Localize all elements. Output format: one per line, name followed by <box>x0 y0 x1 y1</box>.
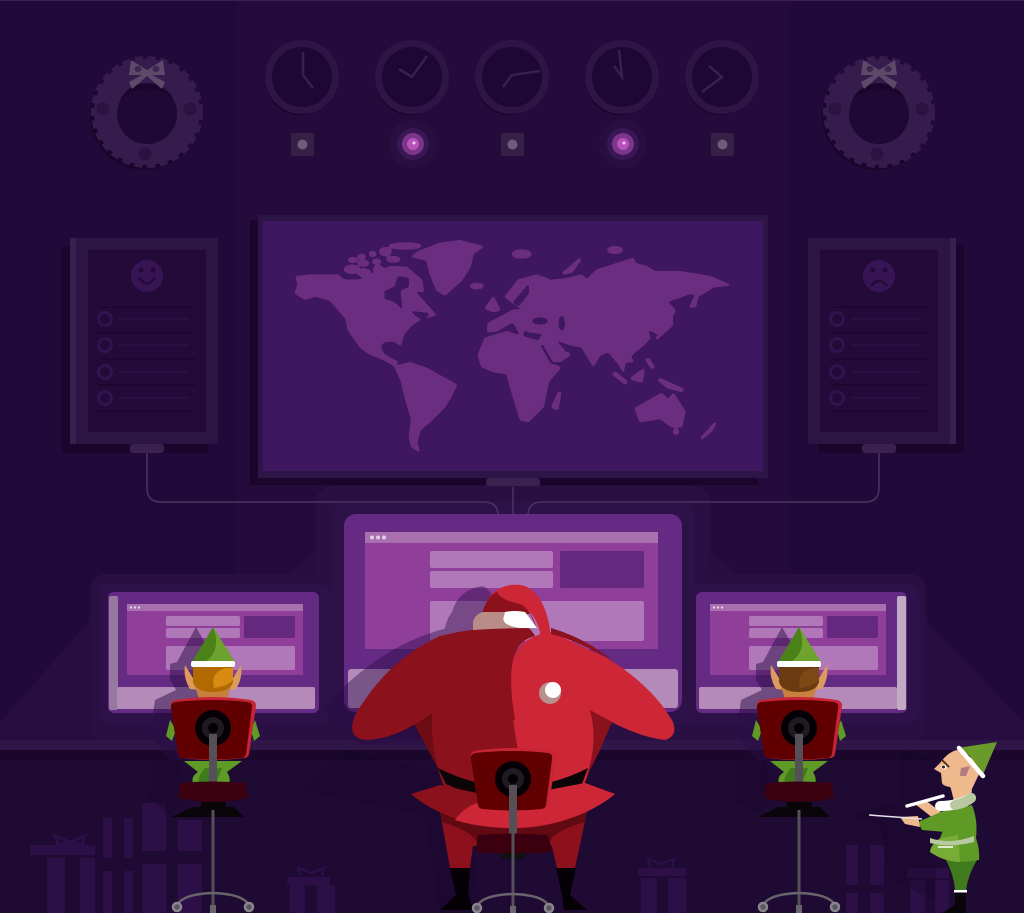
right elf <box>752 627 846 913</box>
torso <box>432 705 598 790</box>
neck <box>193 680 233 702</box>
center monitor <box>344 514 682 712</box>
hair <box>193 666 233 692</box>
greenland <box>412 241 483 295</box>
torso and arms <box>166 720 260 788</box>
left arm <box>352 627 535 740</box>
left monitor <box>108 592 319 713</box>
world map <box>295 241 730 452</box>
santa shadow on screen <box>322 586 500 745</box>
head <box>934 750 981 797</box>
clock 5 <box>685 44 756 115</box>
boots <box>172 807 244 817</box>
eurasia <box>487 258 730 372</box>
hat <box>957 742 997 777</box>
santa chair <box>471 748 556 839</box>
africa <box>478 332 560 422</box>
body back band <box>413 700 612 787</box>
light off 3 <box>501 133 524 156</box>
clock 4 <box>585 44 656 115</box>
hat <box>778 627 821 662</box>
back arm hand <box>915 800 945 822</box>
chair base <box>173 802 253 913</box>
seat <box>178 782 248 802</box>
belt <box>438 768 588 800</box>
ears <box>771 665 827 690</box>
legs <box>440 812 587 868</box>
naughty list panel <box>808 238 964 453</box>
chair <box>757 697 842 788</box>
south america <box>395 363 457 452</box>
hat band <box>959 748 983 776</box>
left elf <box>166 627 260 913</box>
neck <box>950 785 972 805</box>
baton <box>869 815 922 819</box>
north america <box>295 267 436 366</box>
collar shade <box>955 798 971 805</box>
indicator lights <box>291 120 734 168</box>
hat <box>473 585 561 704</box>
name rows <box>98 307 196 411</box>
clocks <box>265 44 756 115</box>
hat <box>192 627 235 662</box>
coat skirt <box>411 783 615 828</box>
ear <box>958 762 979 778</box>
clock 1 <box>265 44 336 115</box>
eye <box>942 764 946 770</box>
good list panel <box>62 238 218 453</box>
neck <box>779 680 819 702</box>
front arm <box>918 806 968 832</box>
ear inner <box>960 766 970 776</box>
conductor elf <box>869 742 997 913</box>
right elf shadow on screen <box>736 627 806 760</box>
islands <box>470 247 715 438</box>
inland seas <box>385 277 573 364</box>
santa chair hub <box>501 853 525 859</box>
land masses <box>295 241 730 452</box>
collar <box>940 798 971 806</box>
smiley icon <box>131 260 163 292</box>
light on 2 <box>389 120 437 168</box>
clock 2 <box>375 44 446 115</box>
wreath left <box>90 59 200 170</box>
left elf shadow on screen <box>150 627 220 760</box>
boots <box>758 807 830 817</box>
leg <box>946 860 977 890</box>
light on 4 <box>599 120 647 168</box>
santa <box>352 585 674 913</box>
cables <box>147 453 879 516</box>
light beams <box>0 486 1024 740</box>
torso and arms <box>752 720 846 788</box>
window dots <box>370 536 386 540</box>
floor shadows <box>150 750 940 913</box>
front hand <box>900 816 920 827</box>
belt <box>930 836 974 845</box>
coat <box>930 805 979 862</box>
australia <box>635 393 685 427</box>
main monitor with world map <box>250 215 768 487</box>
chair <box>171 697 256 788</box>
gifts left <box>30 803 335 913</box>
right shoulder top edge <box>551 628 612 660</box>
seat <box>764 782 834 802</box>
frowny icon <box>863 260 895 292</box>
chair base <box>759 802 839 913</box>
right monitor <box>696 592 907 713</box>
santa chair base <box>473 811 553 913</box>
arctic islands <box>344 243 421 276</box>
light off 5 <box>711 133 734 156</box>
hair <box>779 666 819 692</box>
boots <box>440 868 587 910</box>
light off 1 <box>291 133 314 156</box>
hair brow <box>942 760 949 767</box>
clock 3 <box>475 44 546 115</box>
ears <box>185 665 241 690</box>
name rows <box>830 307 928 411</box>
santa seat <box>476 834 552 853</box>
gifts right <box>638 845 949 913</box>
wreath right <box>822 59 932 170</box>
desk edge <box>0 740 1024 913</box>
white wand <box>907 796 943 806</box>
boot <box>942 892 966 913</box>
right arm and torso lit <box>511 632 674 790</box>
